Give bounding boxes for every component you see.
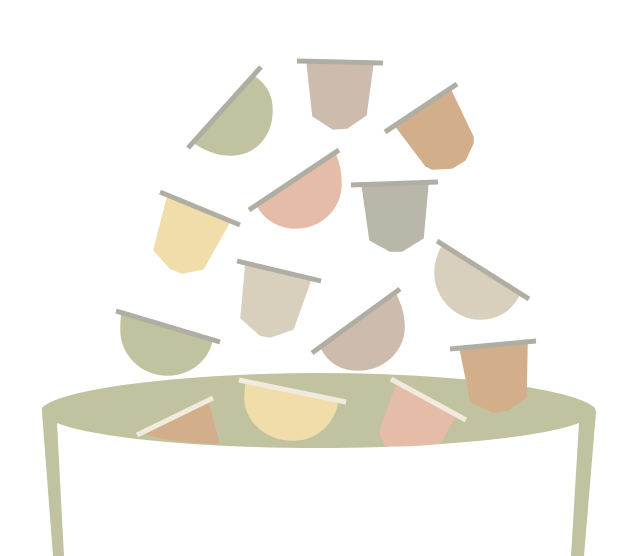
bin bbox=[42, 373, 596, 556]
capsule: yellow bbox=[154, 192, 240, 273]
capsule: pink, inside bin bbox=[380, 379, 466, 446]
capsule: pink half bbox=[249, 150, 341, 228]
capsule: beige center bbox=[237, 261, 321, 337]
capsule: yellow half, inside bin bbox=[239, 380, 346, 440]
capsule: tan lower right bbox=[450, 341, 536, 412]
capsule: taupe top bbox=[297, 61, 383, 129]
capsule: green half top bbox=[188, 67, 272, 155]
capsule: green half left bbox=[116, 311, 220, 375]
capsule: tan, inside bin left bbox=[137, 398, 220, 444]
capsule: tan top right bbox=[385, 84, 473, 169]
capsule: beige half right bbox=[435, 241, 529, 319]
capsule: gray bbox=[351, 182, 438, 251]
capsule: taupe half bbox=[312, 289, 404, 370]
